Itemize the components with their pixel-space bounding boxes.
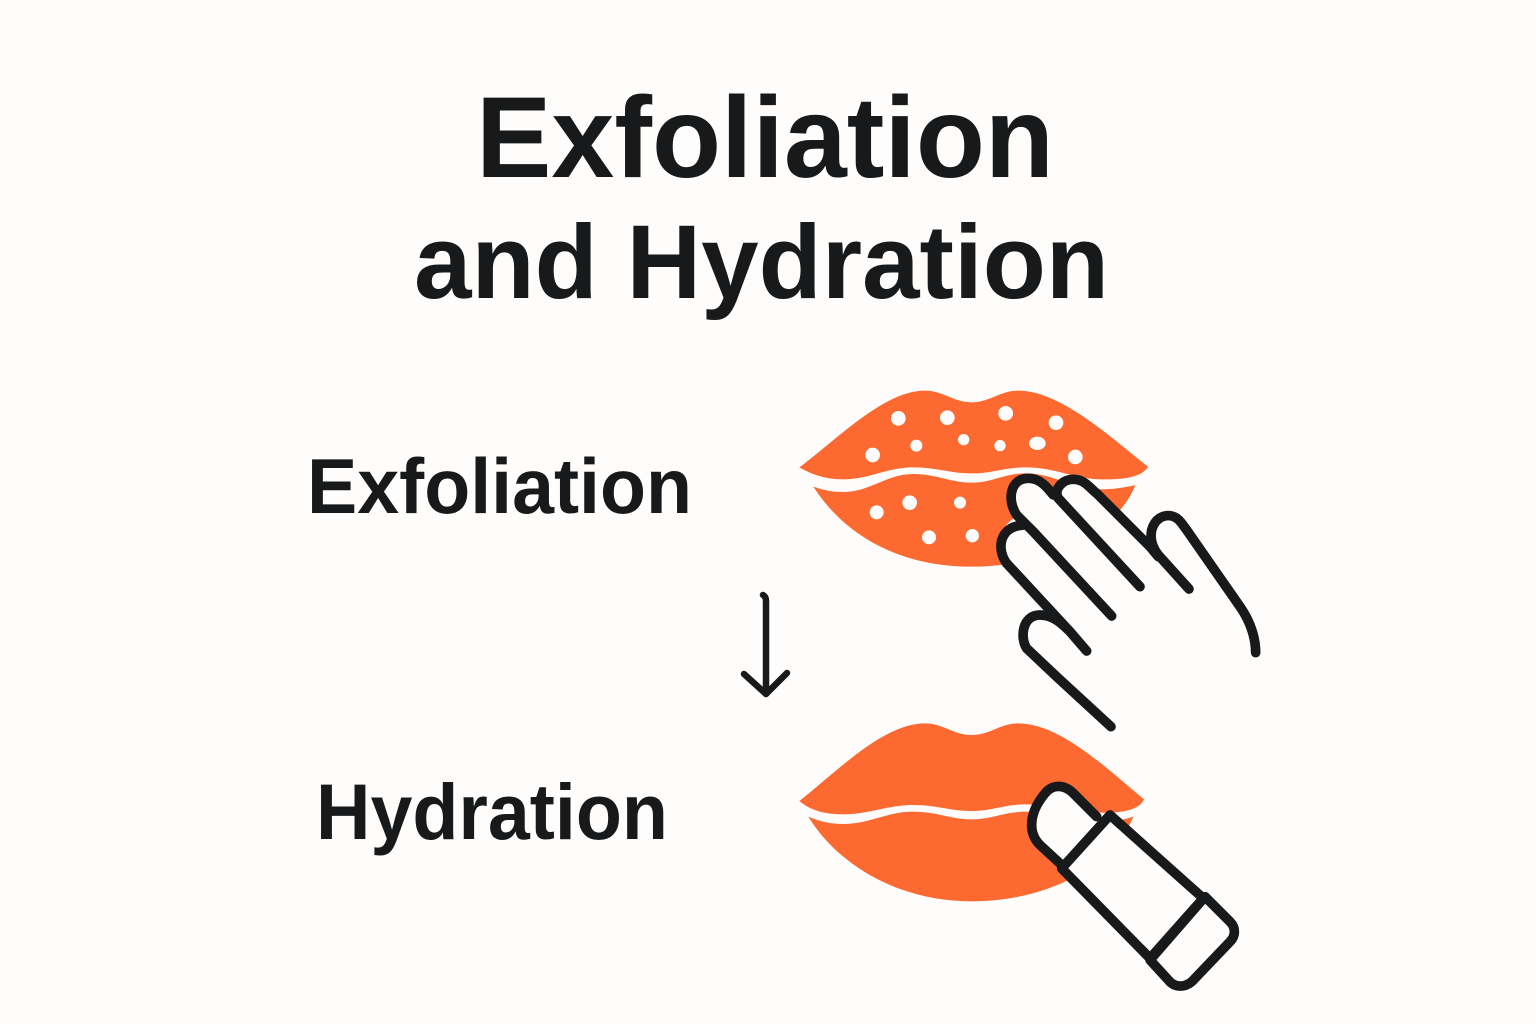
upper lip: [799, 723, 1144, 814]
title: Exfoliation: [476, 74, 1054, 202]
thumb side and wrist edge: [1151, 516, 1256, 653]
illustration: smooth lips: [799, 723, 1144, 901]
upper lip: [799, 391, 1148, 479]
icon: lip balm stick: [1032, 786, 1234, 986]
label: Hydration: Hydration: [316, 767, 668, 856]
balm tip outline: [1032, 786, 1097, 865]
balm tip: [1032, 786, 1108, 865]
tube cap: [1150, 897, 1234, 986]
finger: top left: [1011, 478, 1112, 616]
illustration: exfoliated lips with flakes: [799, 391, 1148, 567]
finger: second: [1057, 479, 1158, 587]
title: [414, 74, 1109, 321]
label: Exfoliation: Exfoliation: [307, 442, 692, 530]
hand fill: [1001, 478, 1256, 727]
lower lip: [813, 473, 1135, 567]
lower lip: [808, 812, 1133, 901]
tube body: [1062, 815, 1203, 958]
skin flakes: [865, 406, 1083, 544]
finger: lowest: [1023, 615, 1111, 727]
icon: hand rubbing lips: [1001, 478, 1256, 727]
finger: third: [1001, 525, 1087, 651]
arrow: down: [744, 595, 787, 694]
title: and Hydration: [414, 204, 1109, 321]
